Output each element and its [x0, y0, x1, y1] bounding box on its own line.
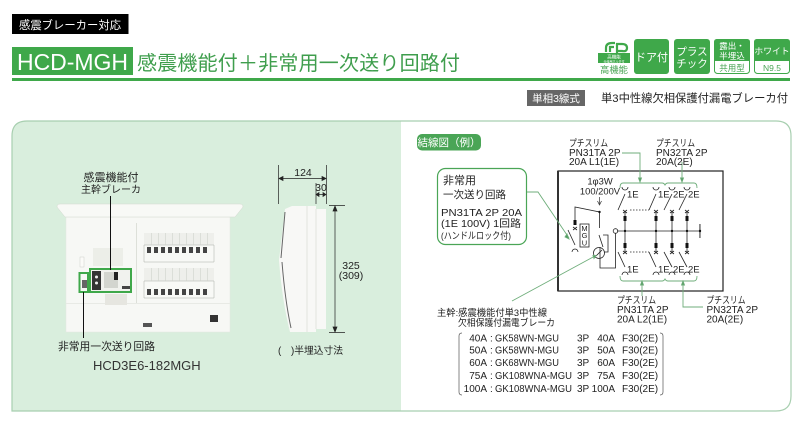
breaker specification table: 60A — [469, 358, 487, 369]
badge: door — [634, 39, 669, 74]
breaker specification table: 40A — [469, 334, 487, 344]
breaker specification table: GK68WN-MGU — [495, 358, 559, 369]
badge: white colour: N9.5 — [763, 63, 781, 73]
breaker specification table: : — [490, 346, 493, 356]
label: breaker L1: プチスリム — [569, 138, 608, 150]
badge: plastic: プラス — [676, 46, 708, 58]
model title: 感震機能付＋非常用一次送り回路付 — [137, 52, 460, 75]
wiring diagram: 2E — [688, 190, 700, 200]
breaker specification table: 3P — [577, 334, 590, 344]
category tag: 感震ブレーカー対応 — [19, 18, 121, 32]
badge: mount type: 半埋込 — [719, 51, 745, 61]
MGU box: M — [581, 224, 588, 233]
label: breaker 2E lower: 20A(2E) — [706, 314, 743, 326]
dimension note: ( )半埋込寸法 — [278, 344, 343, 357]
callout: emergency circuit: (1E 100V) 1回路 — [441, 217, 521, 230]
icon: high function logo: 分岐用ホルダ付 — [603, 58, 625, 64]
green leader lines — [512, 153, 703, 307]
label: breaker 2E upper: 20A(2E) — [656, 157, 693, 168]
breaker specification table: 3P — [577, 358, 590, 369]
MGU box: U — [582, 238, 587, 248]
heading: wiring diagram: 結線図（例） — [418, 136, 480, 149]
breaker specification table: : — [490, 371, 493, 382]
label: breaker 2E lower: プチスリム — [706, 296, 746, 306]
arrow: supply — [598, 197, 602, 205]
wiring type label: 単3中性線欠相保護付漏電ブレーカ付 — [601, 91, 788, 105]
breaker specification table: 3P — [577, 384, 590, 395]
wiring type label — [527, 90, 788, 106]
wiring diagram: 2E — [673, 264, 685, 276]
label: breaker 2E lower: PN32TA 2P — [706, 305, 758, 316]
title rule — [12, 78, 790, 81]
breaker specification table: 60A — [597, 358, 615, 369]
side view with dimensions: 325 — [342, 260, 360, 272]
highlight: main breaker — [90, 269, 131, 292]
callout: emergency circuit: PN31TA 2P 20A — [441, 208, 522, 219]
label: main breaker: 主幹ブレーカ — [81, 183, 141, 196]
model title: HCD-MGH — [17, 49, 128, 75]
breaker specification table: 3P — [577, 346, 590, 356]
breaker specification table: 100A — [592, 384, 615, 395]
wiring type label: 単相3線式 — [532, 92, 580, 105]
breaker specification table: 50A — [469, 346, 487, 356]
wiring diagram: 2E — [673, 190, 685, 200]
breaker specification table: 75A — [469, 371, 487, 382]
breaker specification table: 40A — [597, 334, 615, 344]
breaker specification table: 50A — [597, 346, 615, 356]
wiring diagram: 1E — [627, 264, 639, 276]
label: breaker 2E upper: プチスリム — [656, 138, 695, 150]
breaker specification table: F30(2E) — [622, 358, 658, 369]
label: breaker 2E upper — [656, 138, 708, 168]
label: breaker L2: PN31TA 2P — [617, 305, 669, 316]
wiring diagram: 1E — [658, 264, 670, 276]
breaker specification table: : — [490, 358, 493, 369]
badge: plastic — [674, 39, 710, 74]
callout: emergency circuit — [438, 168, 526, 244]
icon: high function logo: 高機能 — [600, 64, 628, 75]
badge: mount type: 露出・ — [719, 41, 745, 51]
label: main breaker: 感震機能付 — [84, 170, 138, 184]
side view with dimensions — [278, 165, 363, 332]
badge: mount type: 共用型 — [719, 63, 745, 73]
wiring diagram: 100/200V — [580, 186, 621, 196]
label: breaker L1: PN31TA 2P — [569, 148, 621, 159]
wiring diagram: 1E — [658, 190, 670, 200]
badge: white colour: ホワイト — [754, 46, 790, 56]
wiring diagram: 1E — [627, 190, 639, 200]
label: breaker L1: 20A L1(1E) — [569, 157, 619, 168]
breaker specification table: GK58WN-MGU — [495, 346, 559, 356]
label: main breaker — [81, 170, 141, 270]
label: emergency circuit — [58, 292, 155, 353]
highlight: emergency circuit — [80, 273, 88, 292]
badge: door: ドア付 — [635, 51, 668, 64]
label: breaker L2 — [617, 296, 669, 326]
callout: emergency circuit: (ハンドルロック付) — [441, 231, 511, 242]
category tag — [12, 14, 128, 34]
callout: emergency circuit: 非常用 — [443, 174, 476, 187]
breaker specification table — [459, 333, 663, 395]
breaker specification table: 100A — [464, 384, 487, 395]
label: breaker 2E lower — [706, 296, 758, 326]
breaker specification table: GK108WNA-MGU — [495, 384, 572, 395]
model title — [12, 47, 460, 75]
label: breaker L1 — [569, 138, 621, 168]
breaker specification table: GK108WNA-MGU — [495, 371, 572, 382]
breaker specification table: F30(2E) — [622, 371, 658, 382]
breaker specification table: F30(2E) — [622, 346, 658, 356]
label: breaker L2: 20A L2(1E) — [617, 314, 667, 326]
main breaker note — [437, 307, 555, 329]
main breaker note: 欠相保護付漏電ブレーカ — [458, 317, 555, 329]
wiring diagram: 1φ3W — [587, 176, 613, 186]
callout: emergency circuit: 一次送り回路 — [443, 188, 506, 201]
MGU box — [580, 224, 589, 248]
breaker specification table: 3P — [577, 371, 590, 382]
label: breaker L2: プチスリム — [617, 296, 656, 306]
side view with dimensions: 30 — [315, 182, 327, 194]
breaker specification table: : — [490, 334, 493, 344]
breaker specification table: 75A — [597, 371, 615, 382]
badge: plastic: チック — [676, 58, 708, 70]
product photo: distribution board — [57, 204, 243, 332]
icon: high function logo: 高機能 — [607, 54, 621, 60]
main panel — [12, 121, 791, 411]
label: emergency circuit: 非常用一次送り回路 — [58, 339, 155, 353]
badge: mount type — [714, 39, 750, 74]
side view with dimensions: 124 — [294, 167, 312, 179]
breaker specification table: GK58WN-MGU — [495, 334, 559, 344]
label: breaker 2E upper: PN32TA 2P — [656, 148, 708, 159]
model number: HCD3E6-182MGH — [93, 358, 201, 373]
side view with dimensions: (309) — [339, 270, 363, 282]
busbar — [568, 187, 700, 275]
badge: white colour — [754, 39, 790, 74]
breaker specification table: : — [490, 384, 493, 395]
MGU box: G — [582, 231, 588, 240]
icon: high function logo — [598, 43, 630, 75]
wiring diagram — [557, 171, 723, 291]
wiring diagram: 2E — [688, 264, 700, 276]
breaker specification table: F30(2E) — [622, 384, 658, 395]
breaker specification table: F30(2E) — [622, 334, 658, 344]
main breaker note: 主幹:感震機能付単3中性線 — [437, 307, 547, 319]
